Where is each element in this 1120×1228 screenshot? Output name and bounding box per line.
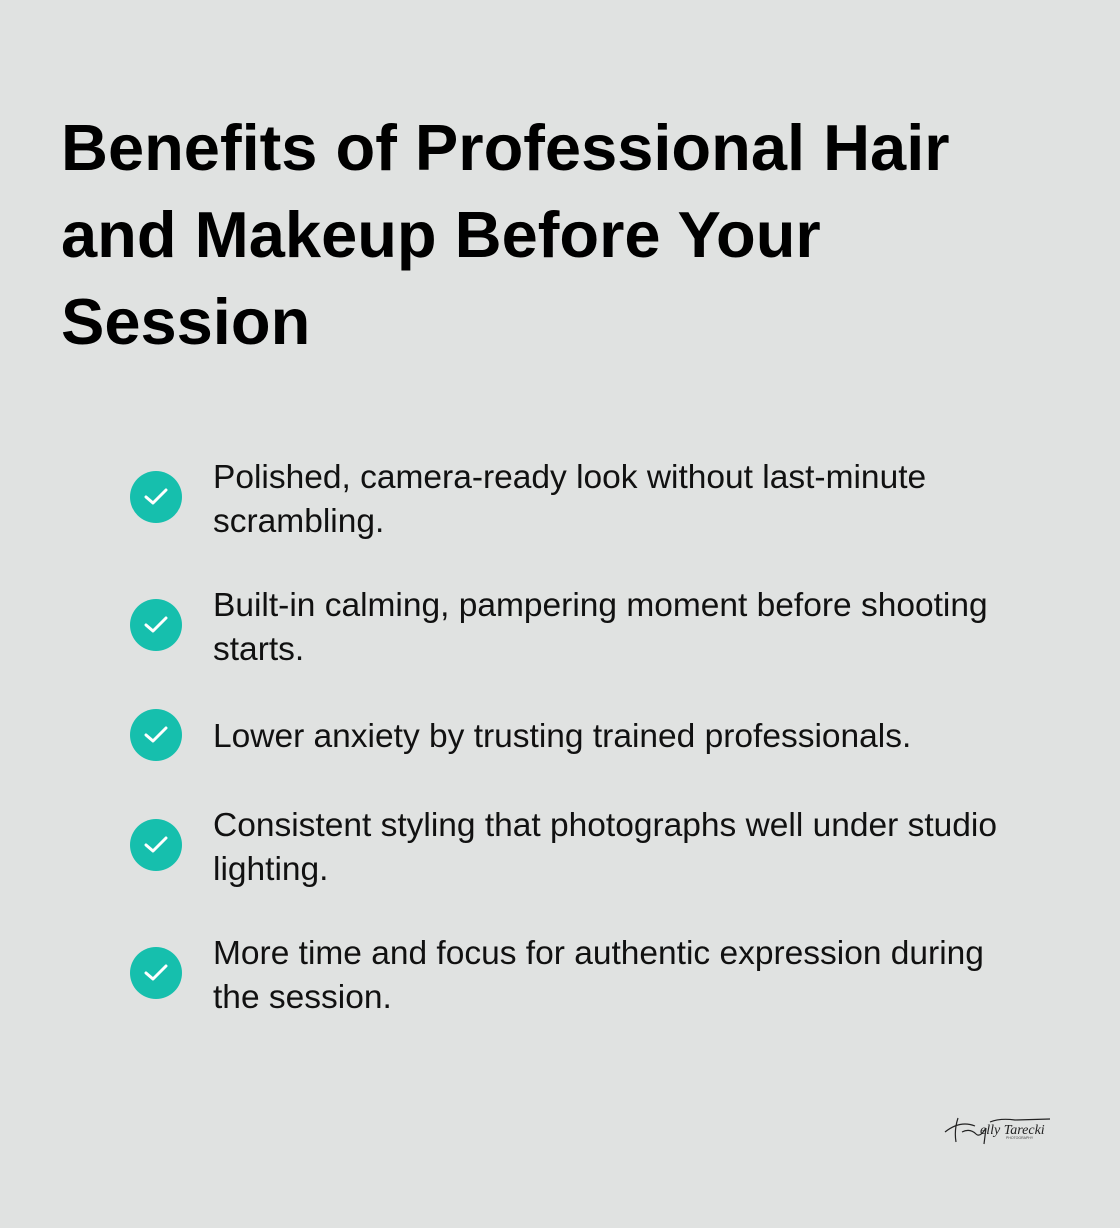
item 4 bbox=[130, 807, 997, 888]
title: Benefits of Professional Hair and Makeup Before Your Session bbox=[61, 111, 950, 358]
text: Consistent styling that photographs well under studio lighting. bbox=[213, 807, 997, 888]
icon: check bbox=[130, 471, 182, 523]
signature logo: elly Tarecki bbox=[980, 1123, 1045, 1138]
icon: check bbox=[130, 947, 182, 999]
signature logo bbox=[944, 1118, 1050, 1144]
icon: check bbox=[130, 599, 182, 651]
text: Polished, camera-ready look without last-minute scrambling. bbox=[213, 459, 926, 540]
text: More time and focus for authentic expression during the session. bbox=[213, 935, 984, 1016]
text: Lower anxiety by trusting trained professionals. bbox=[213, 718, 911, 755]
item 2 bbox=[130, 587, 988, 668]
icon: check bbox=[130, 819, 182, 871]
text: Built-in calming, pampering moment before shooting starts. bbox=[213, 587, 988, 668]
signature logo: PHOTOGRAPHY bbox=[1006, 1136, 1034, 1140]
item 1 bbox=[130, 459, 926, 540]
item 3 bbox=[130, 709, 911, 761]
icon: check bbox=[130, 709, 182, 761]
item 5 bbox=[130, 935, 984, 1016]
